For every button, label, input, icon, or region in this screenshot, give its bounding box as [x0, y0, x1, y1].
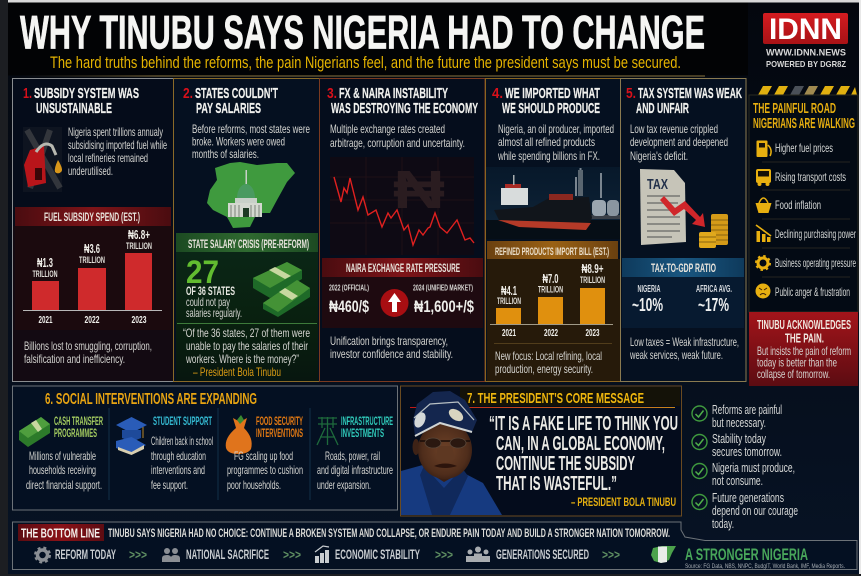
panel 4 heading: 4. — [492, 85, 503, 102]
panel 3 text — [330, 122, 465, 150]
panel 2 heading: 2. — [183, 85, 193, 102]
callout: tax to GDP ratio — [622, 258, 744, 328]
subtitle: The hard truths behind the reforms, the pain Nigerians feel, and the future the president says must be secured. — [50, 54, 681, 72]
item: food inflation — [756, 198, 821, 213]
item: student support: through education — [151, 449, 206, 463]
checklist — [692, 403, 798, 531]
step: generations secured — [466, 546, 589, 562]
panel 5 text: Nigeria's deficit. — [630, 149, 688, 163]
panel 4 text: while spending billions in FX. — [497, 149, 600, 163]
panel 4 text: Nigeria, an oil producer, imported — [498, 122, 614, 136]
item: infrastructure: Roads, power, rail — [325, 449, 380, 463]
bar chart: refined products import bill: REFINED PRODUCTS IMPORT BILL (EST.) — [495, 246, 609, 258]
quote: CAN, IN A GLOBAL ECONOMY, — [496, 432, 665, 455]
panel 3 heading: FX & NAIRA INSTABILITY — [339, 85, 448, 102]
callout: tax to GDP ratio: ~10% — [632, 295, 663, 315]
panel 1: subsidy system — [12, 78, 174, 382]
panel 1 heading: 1. — [23, 85, 32, 102]
panel 3 footer text: Unification brings transparency, — [330, 334, 448, 348]
panel 3 heading: 3. — [327, 85, 337, 102]
bar chart: fuel subsidy spend: 2022 — [84, 314, 100, 326]
check: future generations — [692, 491, 798, 531]
item: higher fuel prices — [756, 140, 833, 157]
panel 3: FX and naira — [320, 78, 485, 382]
panel 2 heading: STATES COULDN'T — [195, 85, 278, 102]
bar chart: refined products import bill: TRILLION — [497, 296, 521, 307]
item: food security: INTERVENTIONS — [256, 428, 303, 440]
callout: state salary crisis: could not pay — [186, 295, 230, 309]
panel 1 text — [68, 125, 167, 178]
panel 5 heading: 5. — [626, 85, 636, 102]
arrows: >>> — [435, 547, 453, 562]
callout: naira exchange rate pressure — [322, 258, 483, 328]
callout: state salary crisis: STATE SALARY CRISIS (PRE-REFORM) — [188, 239, 309, 251]
item: food inflation: Food inflation — [775, 198, 821, 212]
panel 3 footer text — [330, 334, 453, 361]
item: food security: FG scaling up food — [234, 449, 293, 463]
check: future generations: today. — [712, 517, 734, 531]
panel 5 heading: AND UNFAIR — [636, 100, 689, 117]
panel 4 text — [497, 122, 614, 163]
panel 5 footer text — [629, 335, 739, 362]
bar chart: refined products import bill: 2021 — [502, 327, 516, 339]
item: student support: STUDENT SUPPORT — [153, 416, 212, 428]
item: food security — [226, 415, 303, 492]
callout: state salary crisis: OF 36 STATES — [186, 286, 235, 298]
item: infrastructure: INVESTMENTS — [341, 428, 384, 440]
callout: naira exchange rate pressure: 2024 (UNIFIED MARKET) — [413, 282, 473, 292]
step: reform today — [35, 547, 116, 562]
callout: state salary crisis: salaries regularly. — [186, 306, 242, 320]
icon: tax document with falling arrow and coins: TAX — [647, 176, 668, 193]
check: reforms are painful: Reforms are painful — [712, 403, 782, 417]
callout: state salary crisis: – President Bola Tinubu — [193, 365, 281, 379]
icon: fuel pump — [23, 127, 62, 192]
callout: state salary crisis: 27 — [186, 254, 219, 290]
logo: IDNN: WWW.IDNN.NEWS — [766, 48, 846, 58]
panel 4 text: almost all refined products — [498, 135, 595, 149]
bar chart: refined products import bill: 2023 — [586, 327, 600, 339]
panel 2 text: broke. Workers were owed — [192, 134, 285, 148]
panel 1 footer text: falsification and inefficiency. — [24, 352, 125, 366]
panel 3 text: arbitrage, corruption and uncertainty. — [330, 136, 465, 150]
bar chart: fuel subsidy spend: FUEL SUBSIDY SPEND (EST.) — [44, 212, 140, 224]
panel 7: president's core message — [400, 386, 682, 516]
panel 6: social interventions: FOOD SECURITY — [256, 416, 303, 428]
callout: tax to GDP ratio: AFRICA AVG. — [696, 284, 732, 295]
icon: tax document with falling arrow and coins — [640, 169, 728, 248]
bar chart: refined products import bill — [487, 241, 620, 381]
check: Nigeria must produce — [692, 461, 795, 488]
quote attribution: – PRESIDENT BOLA TINUBU — [571, 495, 676, 509]
item: student support: fee support. — [151, 478, 188, 492]
panel 5 text: Low tax revenue crippled — [630, 122, 718, 136]
bar chart: fuel subsidy spend: ₦1.3 — [37, 256, 53, 270]
panel 1 heading: UNSUSTAINABLE — [36, 100, 112, 117]
panel 6: social interventions: Children back in school — [151, 434, 213, 448]
callout: tax to GDP ratio: ~17% — [698, 295, 729, 315]
line chart: naira decline — [330, 157, 474, 255]
line chart: naira decline: ₦ — [393, 160, 445, 220]
item: food security: programmes to cushion — [227, 463, 303, 477]
icon: Nigeria flag map — [651, 546, 676, 563]
panel 5 text — [630, 122, 728, 163]
check: stability today: Stability today — [712, 432, 767, 446]
panel 4 heading — [492, 85, 600, 117]
panel 1 heading: SUBSIDY SYSTEM WAS — [34, 85, 139, 102]
tag: the bottom line — [18, 524, 104, 541]
item: cash transfer: direct financial support. — [26, 478, 102, 492]
step: national sacrifice: NATIONAL SACRIFICE — [186, 547, 269, 562]
panel 4: imports — [486, 78, 620, 382]
item: student support: interventions and — [151, 463, 205, 477]
item: student support — [116, 416, 213, 492]
bar chart: refined products import bill: production, energy security. — [495, 362, 593, 376]
quote — [489, 412, 678, 495]
logo: IDNN — [763, 13, 848, 69]
bar chart: fuel subsidy spend: 2021 — [38, 314, 53, 326]
step: reform today: REFORM TODAY — [55, 547, 116, 562]
item: cash transfer: households receiving — [29, 463, 96, 477]
bar chart: fuel subsidy spend: ₦3.6 — [84, 242, 100, 256]
panel: painful road — [749, 86, 858, 312]
logo: IDNN: IDNN — [769, 13, 842, 46]
item: cash transfer: Millions of vulnerable — [29, 449, 96, 463]
road heading — [753, 101, 855, 132]
bar chart: fuel subsidy spend: TRILLION — [32, 269, 58, 280]
arrows: >>> — [602, 547, 620, 562]
callout: state salary crisis — [176, 233, 318, 381]
bar chart: fuel subsidy spend — [15, 207, 171, 330]
panel 2 text: Before reforms, most states were — [192, 122, 310, 136]
item: infrastructure — [317, 416, 393, 492]
panel 1 text: Nigeria spent trillions annualy — [68, 125, 163, 139]
panel 3 heading: WAS DESTROYING THE ECONOMY — [331, 100, 478, 117]
callout: Tinubu acknowledges the pain: THE PAIN. — [785, 330, 824, 346]
panel 3 footer text: investor confidence and stability. — [330, 347, 453, 361]
callout: naira exchange rate pressure: ₦1,600+/$ — [414, 297, 474, 316]
panel: bottom line — [12, 522, 857, 570]
portrait: President Tinubu — [401, 391, 502, 515]
panel 4 heading: WE SHOULD PRODUCE — [502, 100, 600, 117]
item: cash transfer: PROGRAMMES — [54, 428, 97, 440]
step: generations secured: GENERATIONS SECURED — [496, 547, 589, 562]
icon: Nigeria map with capitol — [207, 162, 295, 228]
panel 1 text: underutilised. — [68, 164, 113, 178]
panel 6 heading: 6. SOCIAL INTERVENTIONS ARE EXPANDING — [45, 391, 257, 408]
check: Nigeria must produce: Nigeria must produce, — [712, 461, 795, 475]
bar chart: refined products import bill: ₦7.0 — [542, 272, 559, 286]
quote: “IT IS A FAKE LIFE TO THINK YOU — [489, 412, 678, 435]
item: declining purchasing power — [756, 225, 856, 242]
callout: tax to GDP ratio: NIGERIA — [638, 284, 660, 295]
step: economic stability: ECONOMIC STABILITY — [335, 547, 420, 562]
panel 1 footer text — [24, 339, 152, 366]
item: public anger — [756, 284, 850, 299]
callout: Tinubu acknowledges the pain — [749, 312, 858, 386]
check: future generations: depend on our courage — [712, 504, 798, 518]
item: food security: poor households. — [227, 478, 281, 492]
bar chart: fuel subsidy spend: 2023 — [132, 314, 147, 326]
callout: state salary crisis: unable to pay the salaries of their — [186, 339, 308, 353]
icon: up arrow — [380, 289, 408, 317]
panel 5 heading — [626, 85, 742, 117]
callout: state salary crisis: workers. Where is the money?” — [185, 352, 299, 366]
callout: state salary crisis: “Of the 36 states, 27 of them were — [183, 326, 310, 340]
bar chart: refined products import bill: TRILLION — [538, 284, 563, 296]
panel 1 heading — [23, 85, 139, 117]
panel 4 heading: WE IMPORTED WHAT — [505, 85, 600, 102]
panel 3 text: Multiple exchange rates created — [330, 122, 445, 136]
panel 5 footer text: weak services, weak future. — [629, 348, 723, 362]
callout: naira exchange rate pressure: 2022 (OFFICIAL) — [329, 282, 369, 292]
arrows: >>> — [283, 547, 301, 562]
bar chart: refined products import bill: 2022 — [544, 327, 558, 339]
panel 6: social interventions — [12, 386, 398, 510]
check: reforms are painful — [692, 403, 782, 430]
quote: CONTINUE THE SUBSIDY — [496, 452, 635, 475]
bar chart: refined products import bill: New focus: Local refining, local — [495, 349, 602, 363]
item: cash transfer — [19, 416, 103, 492]
bar chart: refined products import bill: TRILLION — [580, 275, 605, 286]
panel 2 text: months of salaries. — [192, 147, 259, 161]
check: future generations: Future generations — [712, 491, 784, 505]
panel 6: social interventions: INFRASTRUCTURE — [341, 416, 393, 428]
panel 5 heading: TAX SYSTEM WAS WEAK — [638, 85, 742, 102]
callout: tax to GDP ratio: TAX-TO-GDP RATIO — [651, 263, 716, 275]
step: economic stability — [315, 546, 420, 563]
item: rising transport costs — [756, 169, 846, 186]
icon: cash stacks — [253, 262, 310, 317]
illustration: tanker and refinery — [486, 167, 620, 239]
quote: THAT IS WASTEFUL.” — [496, 472, 617, 495]
arrows: >>> — [129, 547, 147, 562]
panel 1 footer text: Billions lost to smuggling, corruption, — [24, 339, 152, 353]
check: Nigeria must produce: not consume. — [712, 474, 763, 488]
bar chart: refined products import bill: ₦8.9+ — [582, 262, 604, 276]
callout: naira exchange rate pressure: ₦460/$ — [329, 297, 369, 316]
panel 2 text — [192, 122, 310, 161]
check: stability today — [692, 432, 782, 459]
item: infrastructure: under expansion. — [317, 478, 371, 492]
panel 2 heading: PAY SALARIES — [196, 100, 261, 117]
panel 2 heading — [183, 85, 278, 117]
panel 5 footer text: Low taxes = Weak infrastructure, — [630, 335, 739, 349]
bar chart: fuel subsidy spend: TRILLION — [126, 241, 152, 252]
check: reforms are painful: but necessary. — [712, 416, 766, 430]
panel 1 text: local refineries remained — [68, 151, 148, 165]
tag: the bottom line: THE BOTTOM LINE — [21, 526, 100, 540]
bar chart: fuel subsidy spend: TRILLION — [79, 255, 105, 266]
panel 5: tax system — [620, 78, 746, 382]
bar chart: refined products import bill: ₦4.1 — [501, 284, 517, 298]
item: cash transfer: CASH TRANSFER — [54, 416, 103, 428]
logo: IDNN: POWERED BY DGR8Z — [766, 59, 846, 69]
panel 5 text: development and deepened — [630, 135, 728, 149]
item: infrastructure: and digital infrastructure — [317, 463, 393, 477]
bar chart: fuel subsidy spend: ₦6.8+ — [128, 228, 150, 242]
callout: naira exchange rate pressure: NAIRA EXCHANGE RATE PRESSURE — [346, 263, 460, 275]
panel 2: states salaries — [174, 78, 320, 382]
check: stability today: secures tomorrow. — [712, 445, 782, 459]
step: national sacrifice — [162, 547, 269, 562]
panel 1 text: subsidising imported fuel while — [68, 138, 167, 152]
panel 7 heading: 7. THE PRESIDENT'S CORE MESSAGE — [467, 390, 644, 407]
panel 3 heading — [327, 85, 478, 117]
